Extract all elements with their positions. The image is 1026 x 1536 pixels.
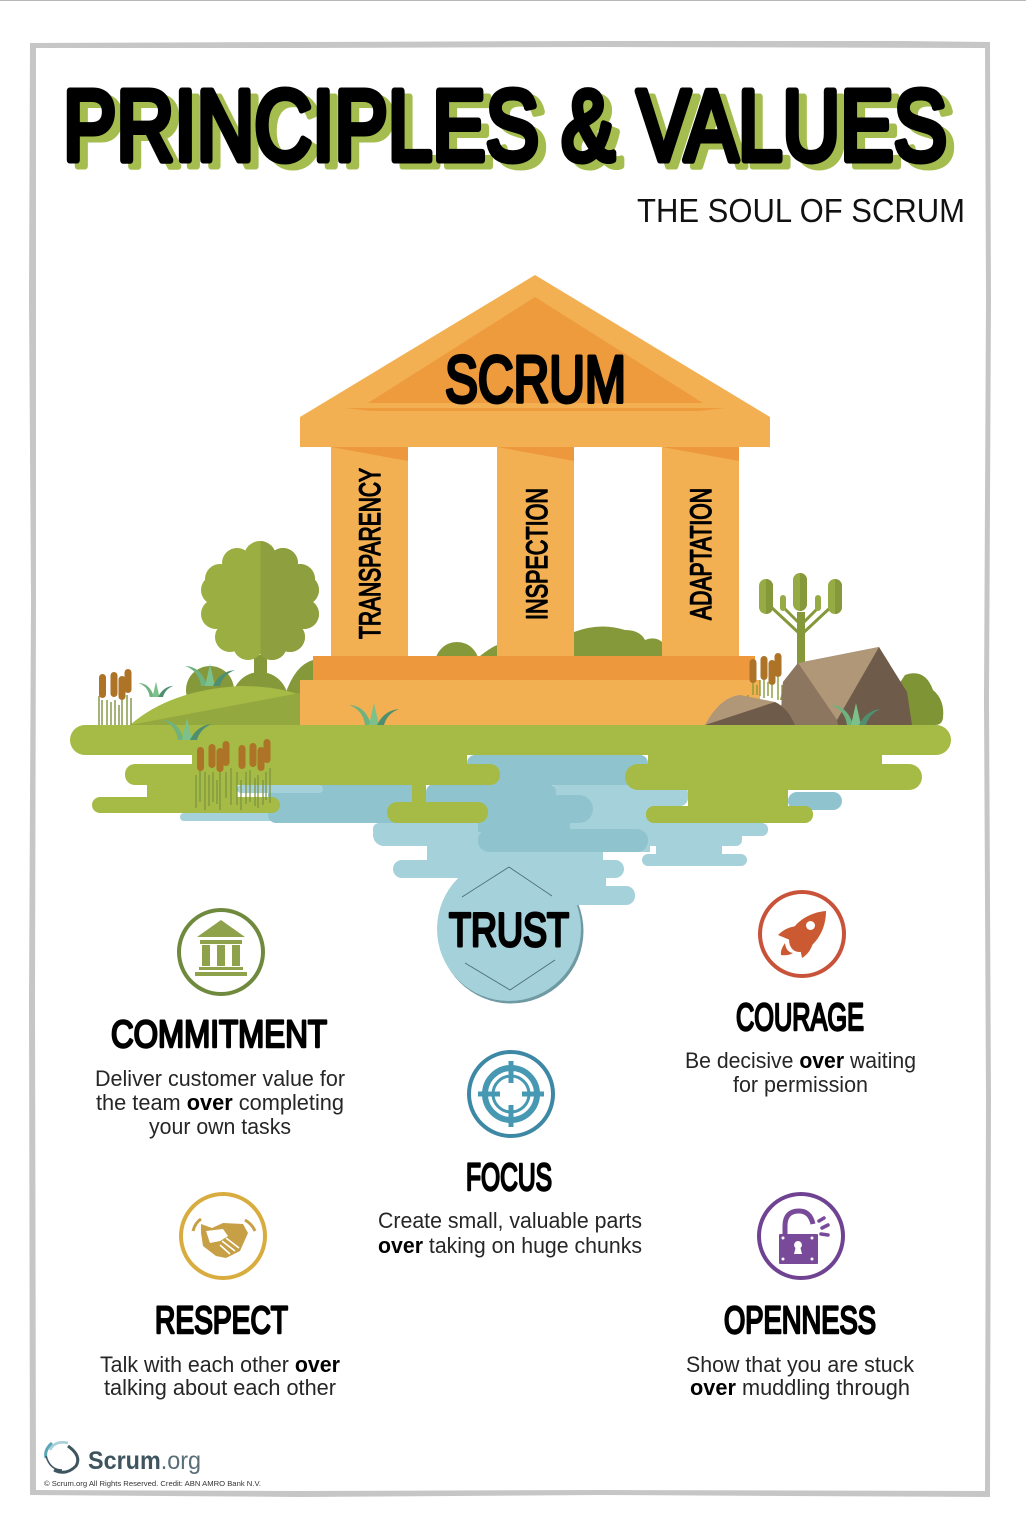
pediment (300, 275, 770, 447)
reeds left (99, 669, 132, 725)
column: transparency: TRANSPARENCY (354, 468, 387, 639)
description: Create small, valuable parts (378, 1208, 642, 1233)
wordmark: Scrum.org (88, 1447, 201, 1475)
hill (130, 686, 305, 725)
description: Show that you are stuck (686, 1352, 915, 1377)
description (95, 1066, 345, 1139)
grass tuft on ground (162, 718, 212, 740)
column: inspection (497, 447, 574, 656)
description: the team over completing (96, 1090, 344, 1115)
heading: OPENNESS (724, 1300, 876, 1342)
heading: COMMITMENT (111, 1014, 327, 1056)
value: focus (378, 1052, 642, 1258)
grass tuft on step (349, 703, 399, 725)
water: dark layer (268, 755, 842, 852)
right tree (759, 573, 842, 667)
description (378, 1208, 642, 1258)
trust circle shape (437, 857, 584, 1004)
green ground (70, 725, 951, 823)
heading: COURAGE (736, 997, 864, 1039)
column: transparency (331, 447, 408, 656)
description: Deliver customer value for (95, 1066, 345, 1091)
heading: RESPECT (155, 1300, 288, 1342)
icon: rocket (760, 892, 844, 976)
icon: target (469, 1052, 553, 1136)
value: courage (685, 892, 916, 1097)
reeds pond (196, 739, 270, 810)
description (685, 1048, 916, 1097)
temple (300, 275, 770, 725)
subtitle: THE SOUL OF SCRUM (637, 192, 965, 229)
description: Talk with each other over (100, 1352, 340, 1377)
value: commitment (95, 910, 345, 1139)
description: your own tasks (149, 1114, 291, 1139)
scrum label: SCRUM (445, 342, 626, 416)
description: for permission (733, 1072, 868, 1097)
icon: open padlock (759, 1194, 843, 1278)
icon: swirl (46, 1442, 78, 1472)
description: over muddling through (690, 1375, 910, 1400)
description (100, 1352, 340, 1400)
icon: handshake (181, 1194, 265, 1278)
description: talking about each other (104, 1375, 336, 1400)
scene: landscape (70, 541, 951, 1004)
trust label (449, 867, 569, 990)
trust label: TRUST (449, 903, 569, 956)
light water strip (237, 785, 323, 793)
column: adaptation: ADAPTATION (685, 488, 718, 620)
base steps (300, 656, 760, 725)
water: light layer (180, 785, 768, 905)
column: adaptation (662, 447, 739, 656)
heading: FOCUS (466, 1157, 552, 1199)
tree (201, 541, 319, 673)
rocks and bush (705, 647, 943, 725)
description: Be decisive over waiting (685, 1048, 916, 1073)
description (686, 1352, 915, 1400)
column: inspection: INSPECTION (521, 488, 554, 620)
description: over taking on huge chunks (378, 1233, 642, 1258)
bushes behind temple (186, 626, 662, 728)
reeds right (748, 653, 782, 700)
copyright: © Scrum.org All Rights Reserved. Credit: ABN AMRO Bank N.V. (44, 1479, 261, 1488)
value: openness (686, 1194, 915, 1400)
value: respect (100, 1194, 340, 1400)
logo (46, 1442, 201, 1475)
grass tufts on hill (138, 664, 235, 697)
icon: bank (179, 910, 263, 994)
